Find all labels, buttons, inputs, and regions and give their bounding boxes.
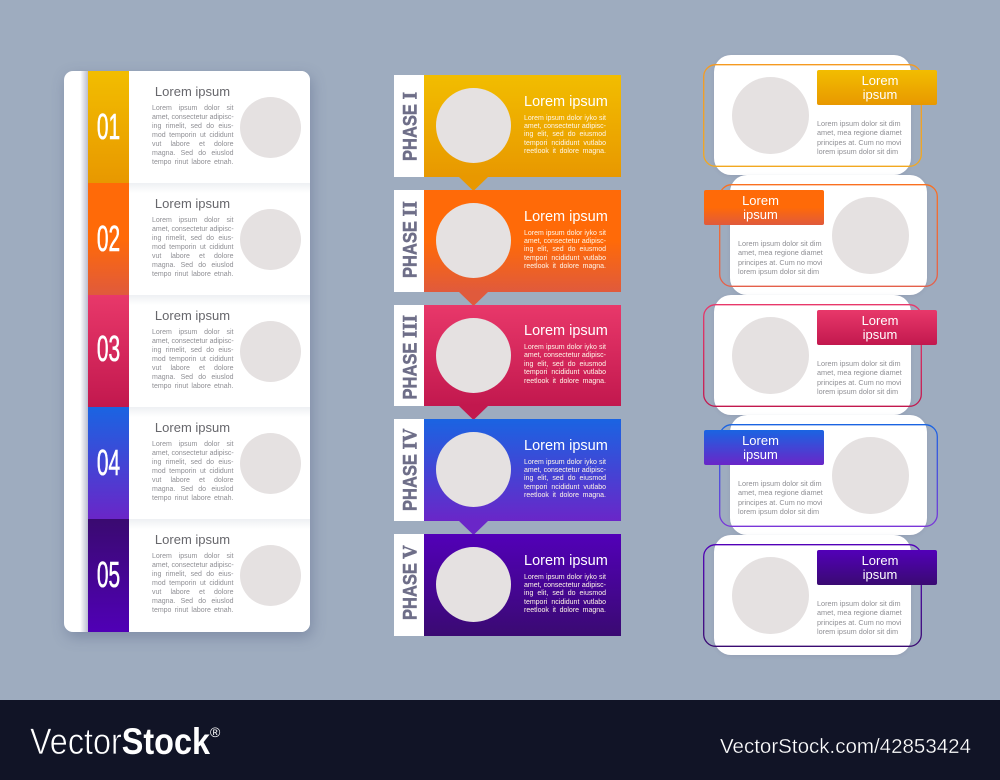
card 2 bbox=[704, 175, 938, 296]
text 05: tempo rinut labore etnah. bbox=[152, 606, 234, 614]
text 02 bbox=[152, 216, 234, 278]
image placeholder 03 bbox=[240, 321, 301, 382]
card 2 label bbox=[704, 190, 824, 224]
number band 01: 01 bbox=[97, 106, 120, 147]
number band 03 bbox=[88, 295, 129, 407]
number band 04 bbox=[88, 407, 129, 519]
text 01: Lorem ipsum dolor sit bbox=[152, 104, 234, 112]
card 5 text bbox=[817, 599, 902, 636]
footer logo and id bbox=[30, 721, 971, 762]
row 04 bbox=[88, 407, 310, 519]
phase II bbox=[394, 190, 621, 305]
card 1 label bbox=[817, 70, 937, 104]
card 2 background bbox=[730, 175, 927, 295]
card 3 text: lorem ipsum dolor sit dim bbox=[817, 387, 898, 396]
phase IV text: tempori ncididunt vutlabo bbox=[524, 484, 606, 491]
card 3 background bbox=[714, 295, 911, 415]
text 01: vut labore et dolore bbox=[152, 140, 234, 148]
phase II text: tempori ncididunt vutlabo bbox=[524, 255, 606, 262]
phase V text: ing elit, sed do eiusmod bbox=[524, 590, 606, 597]
card 1 image placeholder bbox=[732, 77, 809, 154]
text 01: ing rimelit, sed do eius- bbox=[152, 122, 234, 130]
phase II tab: PHASE II bbox=[399, 201, 422, 278]
phase V image placeholder bbox=[436, 547, 511, 622]
text 05: ing rimelit, sed do eius- bbox=[152, 570, 234, 578]
phase IV text: Lorem ipsum dolor iyko sit bbox=[524, 458, 606, 466]
card 3 label: ipsum bbox=[863, 326, 897, 342]
phase IV image placeholder bbox=[436, 432, 511, 507]
phase III pointer bbox=[459, 406, 488, 419]
card 5 outline bbox=[703, 544, 922, 647]
card 1 background bbox=[714, 55, 911, 175]
number band 01 bbox=[88, 71, 129, 183]
phase III tab: PHASE III bbox=[399, 314, 422, 399]
phase I body bbox=[424, 75, 621, 176]
text 04: mod temporin ut cididunt bbox=[152, 468, 234, 474]
card 1 outline bbox=[703, 64, 922, 167]
card 3 text: principes at. Cum no movi bbox=[817, 378, 901, 387]
heading 03: Lorem ipsum bbox=[155, 308, 230, 322]
text 03: ing rimelit, sed do eius- bbox=[152, 346, 234, 354]
phase II pointer bbox=[459, 292, 488, 305]
phase V tab: PHASE V bbox=[399, 545, 422, 620]
number band 02: 02 bbox=[97, 218, 120, 259]
text 01: magna. Sed do eiuslod bbox=[152, 150, 234, 156]
phase III tab bbox=[394, 304, 424, 406]
text 04: Lorem ipsum dolor sit bbox=[152, 440, 234, 448]
phase I tab bbox=[394, 75, 424, 176]
phase IV tab: PHASE IV bbox=[399, 428, 422, 511]
text 01: amet, consectetur adipisc- bbox=[152, 114, 234, 120]
card 4 text: amet, mea regione diamet bbox=[738, 488, 823, 497]
number band 05: 05 bbox=[97, 554, 120, 595]
card 1 text: lorem ipsum dolor sit dim bbox=[817, 147, 898, 156]
phase IV text: amet, consectetur adipisc- bbox=[524, 467, 606, 474]
text 02: vut labore et dolore bbox=[152, 252, 234, 260]
card 3 label bbox=[817, 310, 937, 344]
text 04: magna. Sed do eiuslod bbox=[152, 486, 234, 492]
card 2 text bbox=[738, 239, 823, 276]
text 01: tempo rinut labore etnah. bbox=[152, 158, 234, 166]
card 1 text: amet, mea regione diamet bbox=[817, 128, 902, 137]
text 02: amet, consectetur adipisc- bbox=[152, 226, 234, 232]
text 05: vut labore et dolore bbox=[152, 588, 234, 596]
card 3 image placeholder bbox=[732, 317, 809, 394]
phase II text: amet, consectetur adipisc- bbox=[524, 238, 606, 245]
card 4 label: ipsum bbox=[743, 446, 778, 462]
card 4 text: Lorem ipsum dolor sit dim bbox=[738, 479, 822, 488]
card 1 label: ipsum bbox=[863, 86, 897, 102]
number band 02 bbox=[88, 183, 129, 295]
card 5 image placeholder bbox=[732, 557, 809, 634]
text 03 bbox=[152, 328, 234, 390]
text 05: Lorem ipsum dolor sit bbox=[152, 552, 234, 560]
footer bar bbox=[0, 700, 1000, 780]
phase V text: tempori ncididunt vutlabo bbox=[524, 599, 606, 606]
card 5 text: lorem ipsum dolor sit dim bbox=[817, 627, 898, 636]
phase IV text: ing elit, sed do eiusmod bbox=[524, 475, 606, 482]
phase II image placeholder bbox=[436, 203, 511, 278]
phase I text: Lorem ipsum dolor iyko sit bbox=[524, 114, 606, 122]
phase V heading: Lorem ipsum bbox=[524, 552, 608, 568]
text 04: vut labore et dolore bbox=[152, 476, 234, 484]
phase III text: amet, consectetur adipisc- bbox=[524, 352, 606, 359]
text 01: mod temporin ut cididunt bbox=[152, 132, 234, 138]
card 4 background bbox=[730, 415, 927, 535]
card 3 text: amet, mea regione diamet bbox=[817, 368, 902, 377]
phase I text: amet, consectetur adipisc- bbox=[524, 123, 606, 130]
phase I image placeholder bbox=[436, 88, 511, 163]
phase I text: reetlook it dolore magna. bbox=[524, 148, 606, 155]
phase III text: ing elit, sed do eiusmod bbox=[524, 361, 606, 368]
card 5 text: Lorem ipsum dolor sit dim bbox=[817, 599, 901, 608]
card 5 label: ipsum bbox=[863, 566, 897, 582]
heading 04: Lorem ipsum bbox=[155, 420, 230, 434]
card 4 text bbox=[738, 479, 823, 516]
phase IV text bbox=[524, 458, 606, 499]
card 4 outline bbox=[719, 424, 938, 527]
phase IV bbox=[394, 419, 621, 534]
card 1 label: Lorem bbox=[862, 72, 898, 88]
text 02: tempo rinut labore etnah. bbox=[152, 270, 234, 278]
card 5 label: Lorem bbox=[862, 552, 898, 568]
text 03: mod temporin ut cididunt bbox=[152, 356, 234, 362]
phase IV text: reetlook it dolore magna. bbox=[524, 492, 606, 499]
image placeholder 04 bbox=[240, 433, 301, 494]
number band 05 bbox=[88, 519, 129, 632]
card 1 text: principes at. Cum no movi bbox=[817, 138, 901, 147]
row 03 bbox=[88, 295, 310, 407]
heading 05: Lorem ipsum bbox=[155, 532, 230, 546]
card 4 text: principes at. Cum no movi bbox=[738, 498, 822, 507]
panel: numbered list bbox=[64, 71, 310, 632]
card 2 image placeholder bbox=[832, 197, 909, 274]
card 4 text: lorem ipsum dolor sit dim bbox=[738, 507, 819, 516]
card 4 image placeholder bbox=[832, 437, 909, 514]
heading 01: Lorem ipsum bbox=[155, 84, 230, 98]
text 05 bbox=[152, 552, 234, 614]
card 3 bbox=[703, 295, 937, 416]
text 04 bbox=[152, 440, 234, 502]
card 1 text: Lorem ipsum dolor sit dim bbox=[817, 119, 901, 128]
footer logo and id: VectorStock.com/42853424 bbox=[720, 736, 971, 758]
card 2 text: amet, mea regione diamet bbox=[738, 248, 823, 257]
phase III bbox=[394, 305, 621, 419]
text 01 bbox=[152, 104, 234, 166]
row 02 bbox=[88, 183, 310, 295]
footer logo and id: ® bbox=[210, 724, 221, 740]
phase II text: reetlook it dolore magna. bbox=[524, 263, 606, 270]
phase II tab bbox=[394, 190, 424, 292]
phase I heading: Lorem ipsum bbox=[524, 94, 608, 110]
panel: outlined cards bbox=[703, 55, 938, 656]
text 05: mod temporin ut cididunt bbox=[152, 580, 234, 586]
phase I text: tempori ncididunt vutlabo bbox=[524, 140, 606, 147]
phase III text: reetlook it dolore magna. bbox=[524, 378, 606, 385]
text 05: amet, consectetur adipisc- bbox=[152, 562, 234, 568]
phase III heading: Lorem ipsum bbox=[524, 323, 608, 339]
text 02: Lorem ipsum dolor sit bbox=[152, 216, 234, 224]
footer logo and id: VectorStock bbox=[30, 721, 210, 762]
phase V text bbox=[524, 574, 606, 614]
phase V tab bbox=[394, 534, 424, 636]
row 01 bbox=[88, 71, 310, 183]
text 04: amet, consectetur adipisc- bbox=[152, 450, 234, 456]
card 3 label: Lorem bbox=[862, 312, 898, 328]
card 5 bbox=[703, 535, 937, 656]
phase I bbox=[394, 75, 621, 190]
card 5 text: principes at. Cum no movi bbox=[817, 618, 901, 627]
phase IV heading: Lorem ipsum bbox=[524, 438, 608, 454]
phase V text: reetlook it dolore magna. bbox=[524, 607, 606, 614]
card 3 outline bbox=[703, 304, 922, 407]
text 03: vut labore et dolore bbox=[152, 364, 234, 372]
phase V body bbox=[424, 534, 621, 636]
number band 04: 04 bbox=[97, 442, 120, 483]
phase II body bbox=[424, 190, 621, 292]
text 03: tempo rinut labore etnah. bbox=[152, 382, 234, 390]
phase III text: tempori ncididunt vutlabo bbox=[524, 369, 606, 376]
card 2 label: Lorem bbox=[742, 192, 779, 208]
text 04: tempo rinut labore etnah. bbox=[152, 494, 234, 502]
text 03: magna. Sed do eiuslod bbox=[152, 374, 234, 380]
card 5 label bbox=[817, 550, 937, 584]
heading 02: Lorem ipsum bbox=[155, 196, 230, 210]
image placeholder 01 bbox=[240, 97, 301, 158]
card 2 text: principes at. Cum no movi bbox=[738, 258, 822, 267]
text 03: amet, consectetur adipisc- bbox=[152, 338, 234, 344]
image placeholder 05 bbox=[240, 545, 301, 606]
card 5 background bbox=[714, 535, 911, 655]
phase V text: Lorem ipsum dolor iyko sit bbox=[524, 574, 606, 580]
card 4 bbox=[704, 415, 938, 536]
phase III image placeholder bbox=[436, 318, 511, 392]
text 02: mod temporin ut cididunt bbox=[152, 244, 234, 250]
phase III text: Lorem ipsum dolor iyko sit bbox=[524, 344, 606, 351]
phase IV body bbox=[424, 419, 621, 520]
card 3 text bbox=[817, 359, 902, 396]
text 02: magna. Sed do eiuslod bbox=[152, 262, 234, 268]
text 04: ing rimelit, sed do eius- bbox=[152, 458, 234, 466]
card 2 label: ipsum bbox=[743, 206, 778, 222]
phase V bbox=[394, 534, 621, 636]
phase III body bbox=[424, 304, 621, 406]
phase V text: amet, consectetur adipisc- bbox=[524, 582, 606, 589]
phase I pointer bbox=[459, 177, 488, 190]
card 3 text: Lorem ipsum dolor sit dim bbox=[817, 359, 901, 368]
text 03: Lorem ipsum dolor sit bbox=[152, 328, 234, 336]
phase II text bbox=[524, 230, 606, 270]
image placeholder 02 bbox=[240, 209, 301, 270]
card 4 label bbox=[704, 430, 824, 464]
card 1 text bbox=[817, 119, 902, 156]
card 1 bbox=[703, 55, 937, 176]
phase I text: ing elit, sed do eiusmod bbox=[524, 131, 606, 138]
card 2 outline bbox=[719, 184, 938, 287]
phase II text: ing elit, sed do eiusmod bbox=[524, 246, 606, 253]
phase IV pointer bbox=[459, 521, 488, 534]
phase I tab: PHASE I bbox=[399, 92, 422, 161]
text 02: ing rimelit, sed do eius- bbox=[152, 234, 234, 242]
panel: phases bbox=[394, 75, 621, 636]
card 2 text: Lorem ipsum dolor sit dim bbox=[738, 239, 822, 248]
card 4 label: Lorem bbox=[742, 432, 779, 448]
phase I text bbox=[524, 114, 606, 155]
phase IV tab bbox=[394, 419, 424, 520]
phase II heading: Lorem ipsum bbox=[524, 208, 608, 224]
number band 03: 03 bbox=[97, 328, 120, 369]
row 05 bbox=[88, 519, 310, 632]
card 2 text: lorem ipsum dolor sit dim bbox=[738, 267, 819, 276]
phase III text bbox=[524, 344, 606, 385]
phase II text: Lorem ipsum dolor iyko sit bbox=[524, 230, 606, 236]
card 5 text: amet, mea regione diamet bbox=[817, 608, 902, 617]
text 05: magna. Sed do eiuslod bbox=[152, 598, 234, 604]
